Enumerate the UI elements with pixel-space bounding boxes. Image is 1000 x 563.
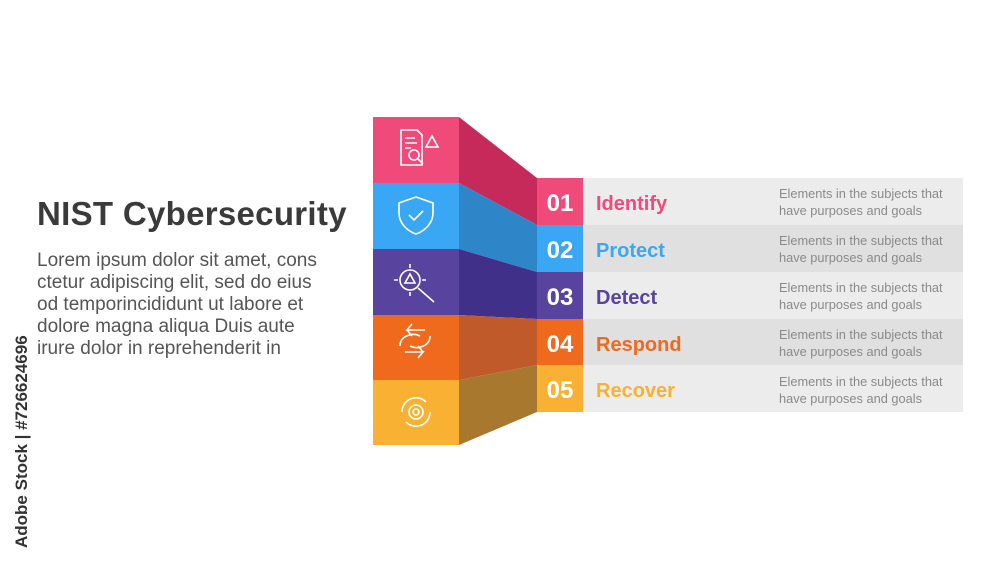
descriptions: Elements in the subjects that: [779, 186, 943, 201]
numbers: 02: [547, 237, 573, 264]
connectors: [459, 117, 537, 445]
title: NIST Cybersecurity: [37, 195, 347, 232]
body text: irure dolor in reprehenderit in: [37, 338, 281, 359]
left blocks: [373, 117, 459, 445]
body text: od temporincididunt ut labore et: [37, 294, 303, 315]
rows background: [583, 178, 963, 412]
icon: arrows exchange: [400, 324, 430, 358]
descriptions: Elements in the subjects that: [779, 374, 943, 389]
numbers: 03: [547, 284, 573, 311]
descriptions: [779, 186, 943, 406]
number boxes: [537, 178, 583, 412]
body text: [37, 250, 317, 359]
descriptions: have purposes and goals: [779, 250, 922, 265]
labels: Protect: [596, 240, 665, 262]
icon: gear cycle: [402, 398, 430, 426]
descriptions: Elements in the subjects that: [779, 327, 943, 342]
icon: detect target: [394, 264, 434, 302]
labels: Detect: [596, 287, 657, 309]
numbers: 05: [547, 377, 573, 404]
numbers: [547, 190, 574, 404]
descriptions: have purposes and goals: [779, 344, 922, 359]
body text: ctetur adipiscing elit, sed do eius: [37, 272, 312, 293]
labels: Identify: [596, 193, 668, 215]
watermark vertical text: Adobe Stock | #726624696: [12, 335, 31, 548]
labels: Recover: [596, 380, 675, 402]
icon: document search: [401, 130, 438, 165]
descriptions: have purposes and goals: [779, 203, 922, 218]
icon: shield: [399, 197, 433, 234]
descriptions: have purposes and goals: [779, 297, 922, 312]
labels: Respond: [596, 334, 682, 356]
descriptions: Elements in the subjects that: [779, 280, 943, 295]
numbers: 01: [547, 190, 573, 217]
descriptions: have purposes and goals: [779, 391, 922, 406]
labels: [596, 193, 682, 402]
numbers: 04: [547, 331, 574, 358]
body text: Lorem ipsum dolor sit amet, cons: [37, 250, 317, 271]
body text: dolore magna aliqua Duis aute: [37, 316, 295, 337]
descriptions: Elements in the subjects that: [779, 233, 943, 248]
